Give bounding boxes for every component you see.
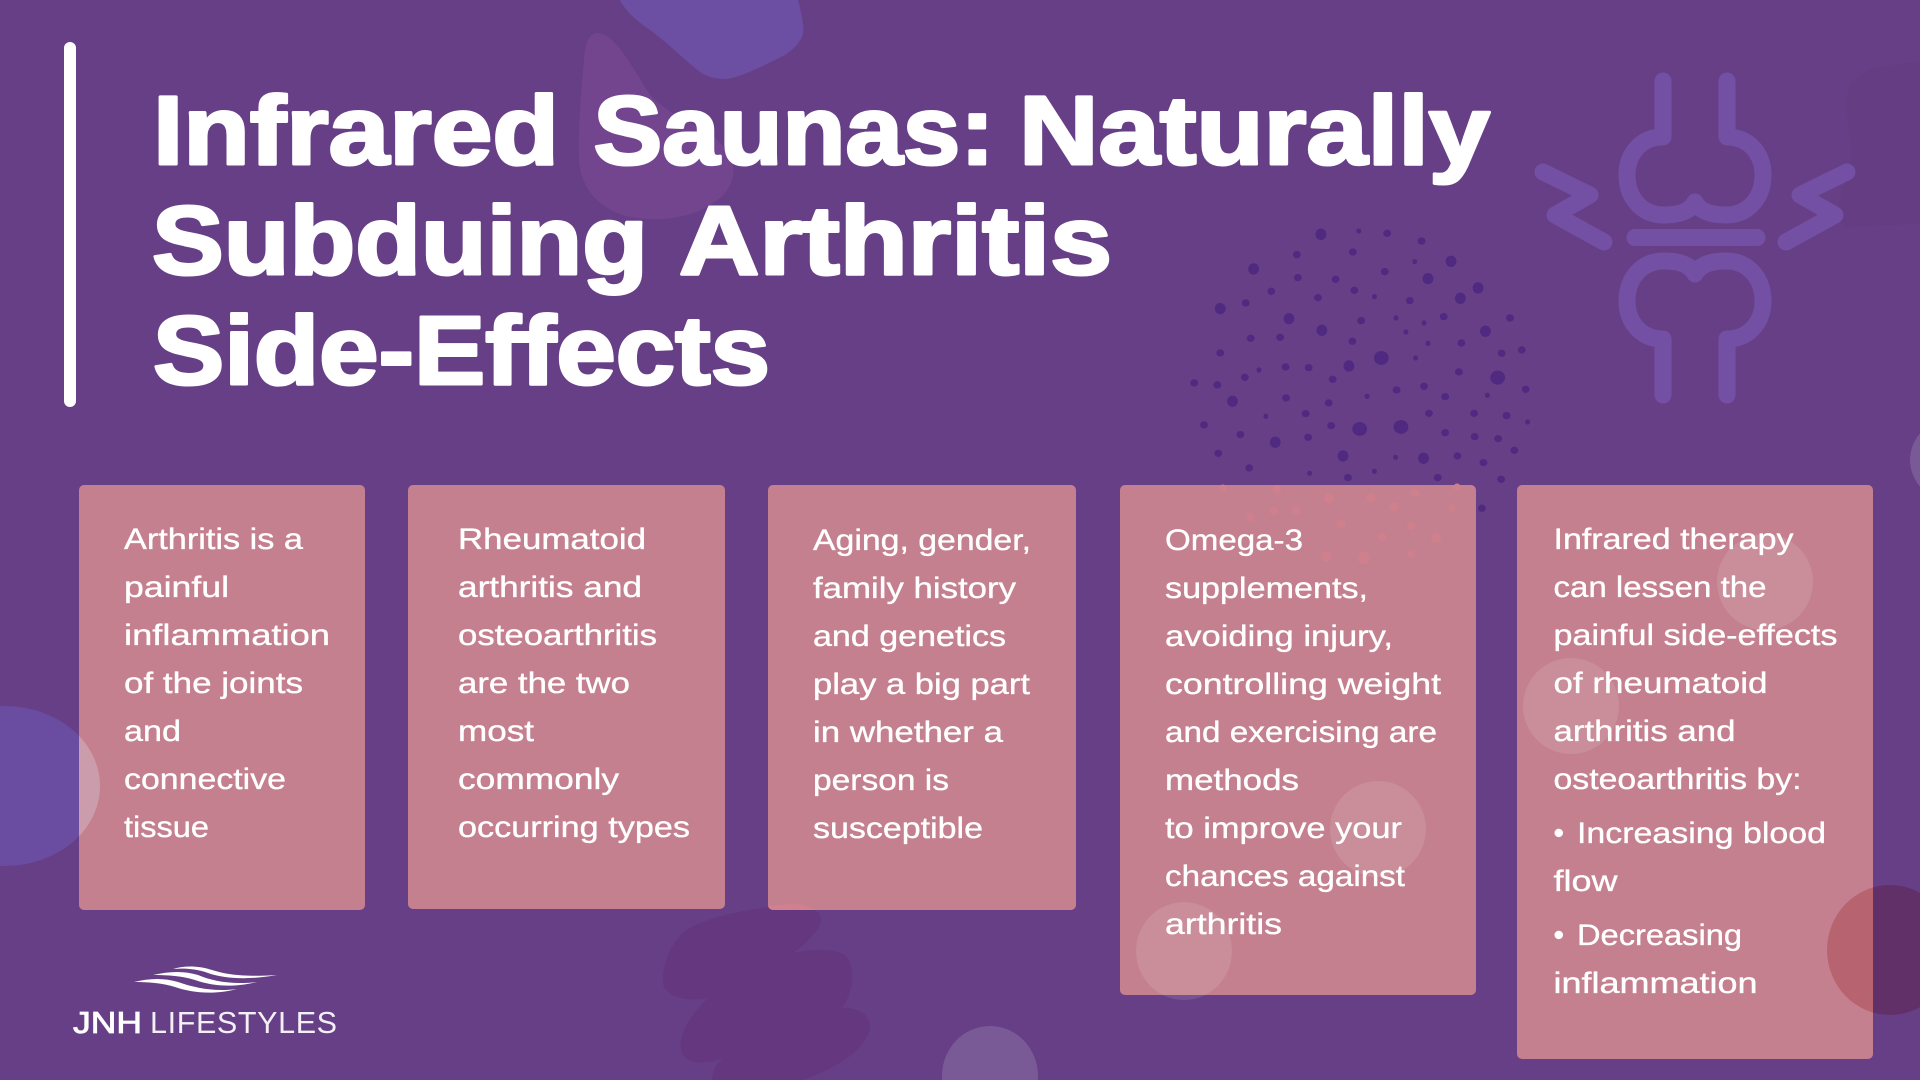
card 2 text: Rheumatoid [458,523,646,556]
card 5 text: can lessen the [1554,571,1766,604]
card 5 text: Increasing blood [1577,817,1826,850]
card 3 text: person is [813,764,949,797]
card 5 text: • [1554,919,1564,952]
card 3 text: and genetics [813,620,1006,653]
title: Subduing [152,186,648,295]
title: Side-Effects [153,296,770,405]
logo wordmark: LIFESTYLES [150,1006,337,1040]
decorative circle: bottom [942,1026,1038,1080]
logo waves [134,966,277,993]
card 3 text: play a big part [813,668,1031,701]
card 5 text: painful side-effects [1554,619,1838,652]
card 2 background [408,485,725,909]
card 2 text: most [458,715,535,748]
card 3 bottom blob overlap [768,904,814,910]
card 1 text [124,523,330,844]
panel: infrared therapy benefits [1517,485,1873,1059]
card 1 text: inflammation [124,619,330,652]
decorative blob: top blue [620,0,803,79]
card 4 circle lower [1136,902,1232,1000]
card 5 text: Decreasing [1577,919,1742,952]
card 5 circle top [1717,534,1813,630]
card 5 circle lower right [1827,888,1873,1012]
dot cluster [1190,228,1530,512]
logo wordmark: JNH [73,1006,142,1040]
card 3 background [768,485,1076,910]
card 1 text: Arthritis is a [124,523,303,556]
card 1 text: tissue [124,811,209,844]
card 2 text: are the two [458,667,630,700]
card 5 text: • [1554,817,1564,850]
card 4 text [1165,524,1442,941]
card 4 text: chances against [1165,860,1406,893]
card 2 text [458,523,690,844]
title [152,76,1490,405]
card 4 dots showing through [1220,484,1460,564]
card 4 text: Omega-3 [1165,524,1303,557]
title: Naturally [1019,76,1490,185]
card 1 text: and [124,715,181,748]
card 3 text: susceptible [813,812,983,845]
card 5 text: of rheumatoid [1554,667,1768,700]
panel: types of arthritis [408,485,725,909]
card 5 text [1554,523,1838,1000]
card 4 text: supplements, [1165,572,1368,605]
card 2 text: commonly [458,763,619,796]
panel: prevention [1120,484,1476,1000]
decorative blob: bottom dark [663,904,870,1080]
card 5 circle left [1523,658,1619,754]
decorative circle: lower right [1827,885,1920,1015]
card 1 text: connective [124,763,286,796]
card 4 background [1120,485,1476,995]
card 3 text: family history [813,572,1016,605]
card 1 overlap circle [79,736,100,836]
card 5 text: osteoarthritis by: [1554,763,1802,796]
card 1 background [79,485,365,910]
card 2 text: arthritis and [458,571,642,604]
decorative circle: left [0,706,100,866]
card 3 text [813,524,1031,845]
card 5 text: Infrared therapy [1554,523,1794,556]
card 4 text: methods [1165,764,1299,797]
icon: knee joint with pain marks [1543,81,1847,395]
card 4 text: to improve your [1165,812,1402,845]
card 4 text: controlling weight [1165,668,1442,701]
card 5 text: flow [1554,865,1618,898]
decorative circle: right edge [1910,420,1920,500]
panel: what arthritis is [79,485,365,910]
decorative blob: teardrop [579,33,733,219]
card 5 background [1517,485,1873,1059]
card 1 text: of the joints [124,667,303,700]
title: Arthritis [679,186,1112,295]
card 2 text: occurring types [458,811,690,844]
decorative blob: top right [1839,62,1920,227]
card 4 text: arthritis [1165,908,1282,941]
title: Saunas: [594,76,994,185]
panel: risk factors [768,485,1076,920]
logo: JNH Lifestyles [73,966,337,1040]
card 3 text: in whether a [813,716,1003,749]
card 1 text: painful [124,571,229,604]
card 3 text: Aging, gender, [813,524,1031,557]
card 4 text: and exercising are [1165,716,1437,749]
accent bar [64,42,76,407]
card 2 text: osteoarthritis [458,619,657,652]
card 4 text: avoiding injury, [1165,620,1393,653]
card 5 text: inflammation [1554,967,1758,1000]
card 4 circle upper [1330,781,1426,877]
title: Infrared [153,76,559,185]
card 5 text: arthritis and [1554,715,1736,748]
